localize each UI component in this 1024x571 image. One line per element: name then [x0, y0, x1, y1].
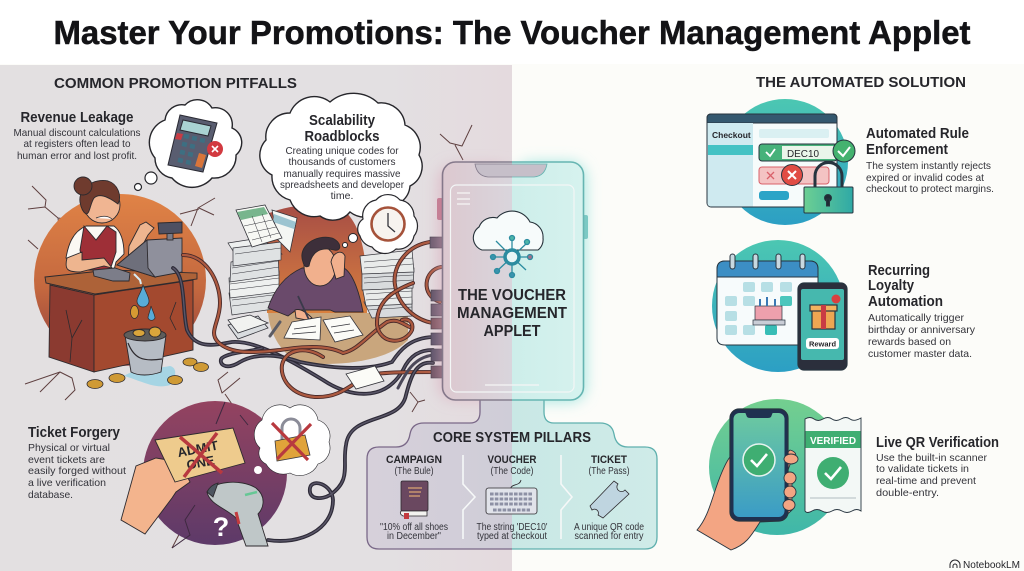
tangled cables: [173, 237, 442, 541]
icon: rule book: [400, 481, 428, 519]
body text: Creating unique codes for: [286, 145, 399, 157]
body line: Manual discount calculations: [14, 127, 140, 139]
phone: [730, 409, 788, 521]
icon: broken padlock: [272, 419, 311, 461]
verified ticket: [805, 418, 861, 512]
cable connectors: [430, 237, 442, 378]
thought bubble: [254, 466, 262, 474]
bucket with coins: [124, 327, 166, 375]
home bar: [485, 384, 539, 386]
thought bubbles: [342, 234, 358, 248]
panel shape with stem and tab: [367, 392, 657, 549]
circle backdrop: teal: [712, 240, 844, 372]
core pillars panel: [367, 392, 657, 549]
body line: easily forged without: [28, 465, 126, 477]
ticket text: admit one: ADMIT: [176, 438, 219, 460]
cloud outline: [358, 195, 418, 254]
scattered coins: [87, 358, 208, 388]
screen: [450, 185, 574, 392]
menu icon: [457, 193, 470, 204]
birthday cake: [753, 297, 785, 325]
woman cashier: [66, 177, 154, 272]
body line: rewards based on: [868, 336, 951, 348]
thought bubbles: [134, 172, 157, 190]
icon: notebook mark: [950, 560, 960, 568]
scene: overwhelmed developer: [228, 205, 414, 364]
reward label: Reward: [809, 340, 836, 348]
body line: database.: [28, 489, 73, 501]
wordmark: NotebookLM: [963, 559, 1020, 571]
body text line: manually requires massive: [284, 168, 401, 180]
circle backdrop: teal: [722, 99, 848, 225]
pen: [270, 322, 280, 336]
notch: [475, 164, 547, 177]
divider chevrons: [463, 455, 572, 539]
sub label: (The Code): [490, 466, 534, 477]
heading line two: Enforcement: [866, 142, 948, 158]
dark loop cable: [221, 337, 433, 368]
body line: human error and lost profit.: [17, 150, 137, 162]
dark cable lower: [398, 355, 433, 388]
thought cloud: scalability roadblocks: [260, 93, 422, 220]
desk papers: [284, 316, 363, 342]
body text line: time.: [331, 190, 353, 202]
description line: scanned for entry: [574, 531, 644, 542]
pillar: voucher: [476, 454, 548, 542]
description line: The string 'DEC10': [476, 522, 548, 533]
applet title: THE VOUCHER: [458, 287, 566, 304]
checkout label: Checkout: [712, 130, 751, 140]
heading: Automated Rule: [866, 126, 969, 142]
cash register: [93, 222, 182, 284]
circle backdrop: green: [709, 399, 845, 535]
cloud: [473, 211, 543, 250]
verified ticket: VERIFIED: [810, 436, 856, 447]
body line: double-entry.: [876, 487, 939, 499]
heading: Ticket Forgery: [28, 425, 120, 441]
label: VOUCHER: [488, 454, 537, 466]
question mark: ?: [213, 512, 229, 542]
code label: DEC10: [787, 148, 819, 160]
circle backdrop: purple: [143, 401, 287, 545]
heading: common promotion pitfalls: COMMON PROMOTION PITFALLS: [54, 76, 297, 92]
body line: customer master data.: [868, 348, 972, 360]
heading: Live QR Verification: [876, 435, 999, 451]
dark cable to scanner: [268, 363, 433, 541]
icon: calculator: [168, 115, 223, 172]
description line: "10% off all shoes: [380, 522, 448, 533]
padlock: [804, 162, 853, 213]
phone body: [442, 162, 584, 400]
description line: typed at checkout: [477, 531, 547, 542]
pillar: campaign: [380, 454, 448, 542]
cloud outline: [149, 100, 242, 187]
heading line two: Loyalty: [868, 278, 914, 294]
desk surface: [268, 313, 408, 364]
dark cable from register: [173, 268, 433, 394]
body text line: spreadsheets and developer: [280, 179, 404, 191]
copper loop small: [427, 267, 441, 302]
circle backdrop: orange: [34, 194, 206, 366]
side buttons: [437, 198, 588, 239]
notebooklm watermark: [950, 559, 1020, 571]
browser window: [707, 114, 837, 207]
loose note: [346, 366, 384, 389]
small paper stack: [228, 315, 268, 339]
ticket body: [155, 428, 245, 482]
copper loop right top: [395, 242, 433, 323]
circle backdrop: maroon: [267, 205, 367, 313]
background: title band: [0, 0, 1024, 64]
water drops and falling coin: [130, 285, 155, 320]
body line: expired or invalid codes at: [866, 172, 984, 184]
barcode scanner: [207, 482, 268, 546]
body line: event tickets are: [28, 454, 105, 466]
description line: A unique QR code: [574, 522, 644, 533]
spilled water: [124, 366, 175, 386]
text: recurring loyalty automation: [868, 263, 976, 360]
solution: recurring loyalty: [712, 240, 847, 372]
heading line three: Automation: [868, 294, 943, 310]
sub label: (The Pass): [588, 466, 630, 477]
applet title: MANAGEMENT: [457, 305, 568, 322]
background: left half: [0, 65, 512, 571]
paper stack: left: [228, 238, 282, 315]
red cross: [180, 433, 222, 477]
body line: Physical or virtual: [28, 442, 110, 454]
body line: birthday or anniversary: [868, 324, 976, 336]
icon: clock: [372, 208, 404, 240]
solution: live qr verification: [697, 399, 861, 550]
heading: Revenue Leakage: [20, 110, 134, 126]
copper loop lower: [377, 283, 413, 341]
applet title: [457, 287, 568, 340]
cloud outline: [260, 93, 422, 220]
label: TICKET: [591, 454, 627, 466]
body line: real-time and prevent: [876, 475, 976, 487]
body line: a live verification: [28, 477, 106, 489]
paper stack: right: [360, 250, 414, 318]
calendar: [717, 254, 818, 345]
cracks in circle: [172, 402, 248, 548]
heading: Recurring: [868, 263, 930, 279]
hand: [697, 450, 796, 550]
copper cable from register: [183, 255, 412, 353]
heading line two: Roadblocks: [304, 129, 380, 145]
thought cloud: calculator: [134, 100, 242, 190]
body line: The system instantly rejects: [866, 160, 991, 172]
ticket text: admit one: ONE: [185, 452, 216, 473]
icon: keyboard: [486, 480, 537, 514]
sub label: (The Bule): [394, 466, 434, 477]
forged ticket: [155, 428, 245, 482]
thought cloud: clock: [342, 195, 418, 254]
icon: cloud network: [473, 211, 543, 278]
hand holding ticket: [121, 458, 190, 534]
icon: ticket: [590, 481, 629, 518]
pillar: ticket: [574, 454, 644, 542]
scene: cashier revenue leakage: [34, 177, 208, 388]
body line: Automatically trigger: [868, 312, 965, 324]
central phone: [437, 162, 588, 400]
network hub: [490, 236, 532, 278]
desk: [45, 270, 197, 372]
title: Master Your Promotions: The Voucher Management Applet: [54, 14, 971, 51]
scene: ticket forgery: [121, 401, 330, 548]
heading: the automated solution: THE AUTOMATED SOLUTION: [756, 75, 966, 91]
text: automated rule enforcement: [866, 126, 994, 195]
cloud outline: [254, 405, 330, 476]
ticket text: admit one: [176, 438, 222, 474]
text: revenue leakage: [14, 110, 140, 162]
heading: core system pillars: CORE SYSTEM PILLARS: [433, 430, 591, 446]
spreadsheet papers: [236, 205, 297, 252]
status icons: [766, 140, 855, 186]
phone glow: [438, 162, 586, 402]
body line: checkout to protect margins.: [866, 183, 994, 195]
wall cracks: [25, 125, 472, 548]
body line: to validate tickets in: [876, 463, 969, 475]
body text line: thousands of customers: [288, 156, 396, 168]
label: CAMPAIGN: [386, 454, 442, 466]
solution: automated rule enforcement: [707, 99, 855, 225]
text: ticket forgery: [28, 425, 126, 501]
body line: Use the built-in scanner: [876, 452, 988, 464]
description line: in December": [387, 531, 441, 542]
applet title: APPLET: [484, 323, 541, 340]
heading: scalability roadblocks: Scalability: [309, 113, 375, 129]
text: live qr verification: [876, 435, 999, 499]
fingers: [783, 454, 798, 510]
body line: at registers often lead to: [24, 138, 131, 150]
reward phone: [798, 283, 847, 370]
man at desk: [268, 237, 363, 322]
copper bottom cable: [282, 350, 440, 397]
